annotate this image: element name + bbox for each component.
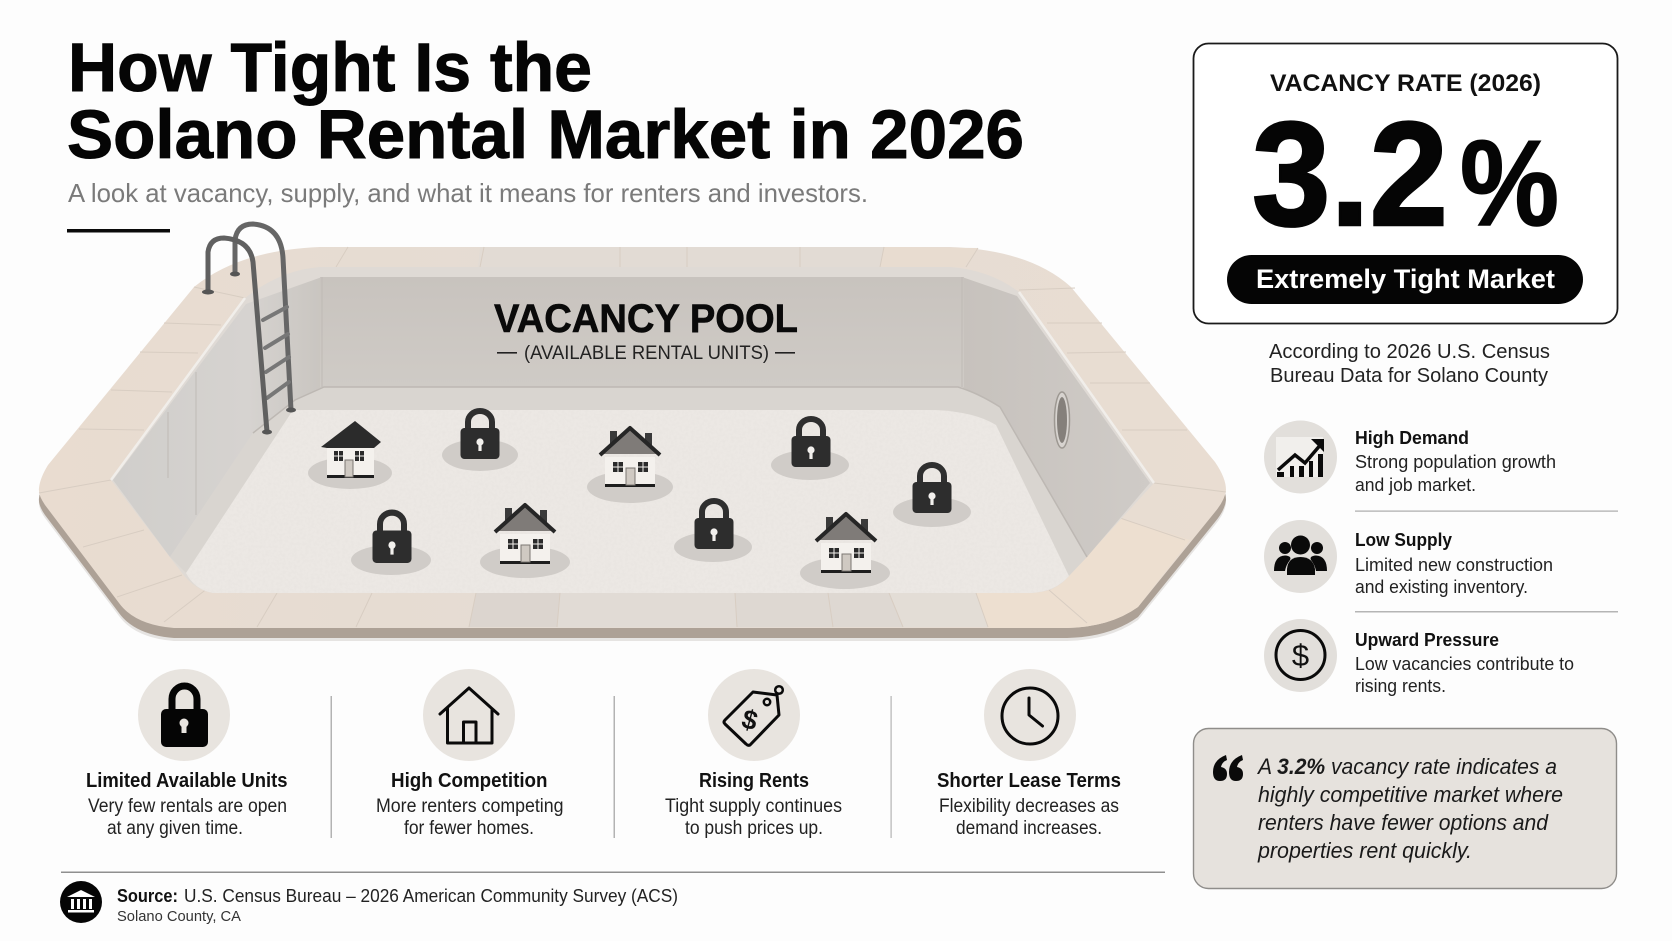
lock marker 4 bbox=[893, 465, 971, 527]
quote text: properties rent quickly. bbox=[1257, 838, 1472, 863]
pool inner rim bbox=[111, 267, 1154, 593]
description: demand increases. bbox=[956, 818, 1102, 839]
house marker 3 bbox=[587, 428, 673, 503]
quote text: renters have fewer options and bbox=[1258, 810, 1549, 835]
KPI value: 3.2 bbox=[1252, 92, 1448, 257]
house marker 2 bbox=[480, 505, 570, 578]
description bbox=[1355, 452, 1556, 495]
KPI value bbox=[1252, 92, 1559, 257]
description: Strong population growth bbox=[1355, 452, 1556, 472]
deck tile joints bbox=[39, 247, 1226, 627]
description: Low vacancies contribute to bbox=[1355, 654, 1574, 674]
heading: Rising Rents bbox=[699, 770, 809, 792]
quote text: highly competitive market where bbox=[1258, 782, 1563, 807]
icon: house outline bbox=[423, 669, 515, 761]
pool wall drain bbox=[1054, 392, 1070, 448]
pool label: VACANCY POOL bbox=[494, 297, 798, 341]
icon: people bbox=[1264, 520, 1337, 593]
right pool wall bbox=[962, 277, 1150, 557]
factor: upward pressure bbox=[1264, 619, 1574, 696]
pool floor bbox=[186, 410, 1069, 593]
quote text bbox=[1256, 754, 1563, 863]
title accent rule bbox=[67, 229, 170, 232]
rim highlights bbox=[111, 292, 1154, 483]
lock marker 1 bbox=[442, 411, 518, 471]
description: at any given time. bbox=[107, 818, 243, 839]
KPI status pill: Extremely Tight Market bbox=[1256, 264, 1555, 294]
icon: growth chart bbox=[1264, 420, 1337, 494]
title: How Tight Is the bbox=[68, 29, 592, 106]
pool ladder bbox=[202, 224, 296, 434]
description: Limited new construction bbox=[1355, 555, 1553, 575]
description bbox=[939, 796, 1119, 839]
heading: Upward Pressure bbox=[1355, 630, 1499, 650]
heading: High Demand bbox=[1355, 428, 1469, 448]
description: and existing inventory. bbox=[1355, 577, 1528, 597]
lock marker 5 bbox=[674, 501, 752, 562]
left pool wall bbox=[113, 277, 322, 557]
description bbox=[376, 796, 564, 839]
subtitle: A look at vacancy, supply, and what it means for renters and investors. bbox=[68, 178, 868, 208]
pool floor cove and ledge bbox=[170, 387, 1087, 578]
pool label: (AVAILABLE RENTAL UNITS) bbox=[524, 343, 769, 364]
source citation: U.S. Census Bureau – 2026 American Community Survey (ACS) bbox=[184, 886, 678, 906]
illustration: empty vacancy pool bbox=[39, 224, 1226, 641]
source citation: Solano County, CA bbox=[117, 908, 241, 925]
icon: dollar coin bbox=[1264, 619, 1337, 692]
icon: clock bbox=[984, 669, 1076, 761]
title bbox=[67, 29, 1024, 173]
back pool wall bbox=[320, 277, 964, 387]
source citation: Source: bbox=[117, 886, 178, 906]
source citation bbox=[117, 886, 678, 925]
house marker 4 bbox=[800, 514, 890, 589]
KPI label: VACANCY RATE (2026) bbox=[1270, 70, 1541, 97]
description bbox=[1355, 654, 1574, 696]
heading: High Competition bbox=[391, 770, 548, 792]
pool ground shadow bbox=[39, 260, 1226, 641]
panel: quote callout bbox=[1194, 728, 1616, 888]
icon: padlock bbox=[138, 669, 230, 761]
description bbox=[665, 796, 842, 839]
description: Very few rentals are open bbox=[88, 796, 287, 817]
factor: high demand bbox=[1264, 420, 1556, 495]
effect: limited available units bbox=[86, 669, 288, 839]
KPI status pill bbox=[1227, 255, 1583, 304]
KPI source note: Bureau Data for Solano County bbox=[1270, 364, 1549, 387]
heading: Low Supply bbox=[1355, 530, 1452, 550]
effect: rising rents bbox=[665, 669, 842, 839]
heading: Limited Available Units bbox=[86, 770, 288, 792]
description: for fewer homes. bbox=[404, 818, 534, 839]
description: Flexibility decreases as bbox=[939, 796, 1119, 817]
lock marker 3 bbox=[771, 419, 849, 480]
KPI value: % bbox=[1460, 115, 1559, 251]
icon: institution building bbox=[60, 881, 102, 923]
description: to push prices up. bbox=[685, 818, 823, 839]
icon: price tag bbox=[708, 669, 800, 761]
KPI source note: According to 2026 U.S. Census bbox=[1269, 340, 1550, 363]
factor: low supply bbox=[1264, 520, 1553, 597]
floor texture bbox=[186, 410, 1069, 593]
heading: Shorter Lease Terms bbox=[937, 770, 1121, 792]
description: rising rents. bbox=[1355, 676, 1446, 696]
icon: price tag: $ bbox=[739, 704, 761, 736]
title: Solano Rental Market in 2026 bbox=[67, 96, 1024, 173]
deck tile tints bbox=[469, 247, 1190, 628]
panel: vacancy rate KPI card bbox=[1194, 44, 1618, 324]
description: More renters competing bbox=[376, 796, 564, 817]
house marker 1 bbox=[308, 421, 392, 489]
description: and job market. bbox=[1355, 475, 1476, 495]
icon: dollar coin: $ bbox=[1292, 638, 1309, 673]
effect: high competition bbox=[376, 669, 564, 839]
description bbox=[88, 796, 287, 839]
quote text: A 3.2% vacancy rate indicates a bbox=[1256, 754, 1557, 779]
KPI source note bbox=[1269, 340, 1550, 387]
pool label bbox=[494, 297, 798, 364]
effect: shorter lease terms bbox=[937, 669, 1121, 839]
pool deck top surface bbox=[39, 247, 1226, 628]
footer: source bbox=[60, 881, 678, 925]
description bbox=[1355, 555, 1553, 597]
wall seams bbox=[168, 277, 962, 515]
description: Tight supply continues bbox=[665, 796, 842, 817]
pool deck edge thickness bbox=[39, 257, 1226, 638]
lock marker 2 bbox=[351, 513, 431, 575]
icon: quote mark bbox=[1213, 755, 1243, 781]
